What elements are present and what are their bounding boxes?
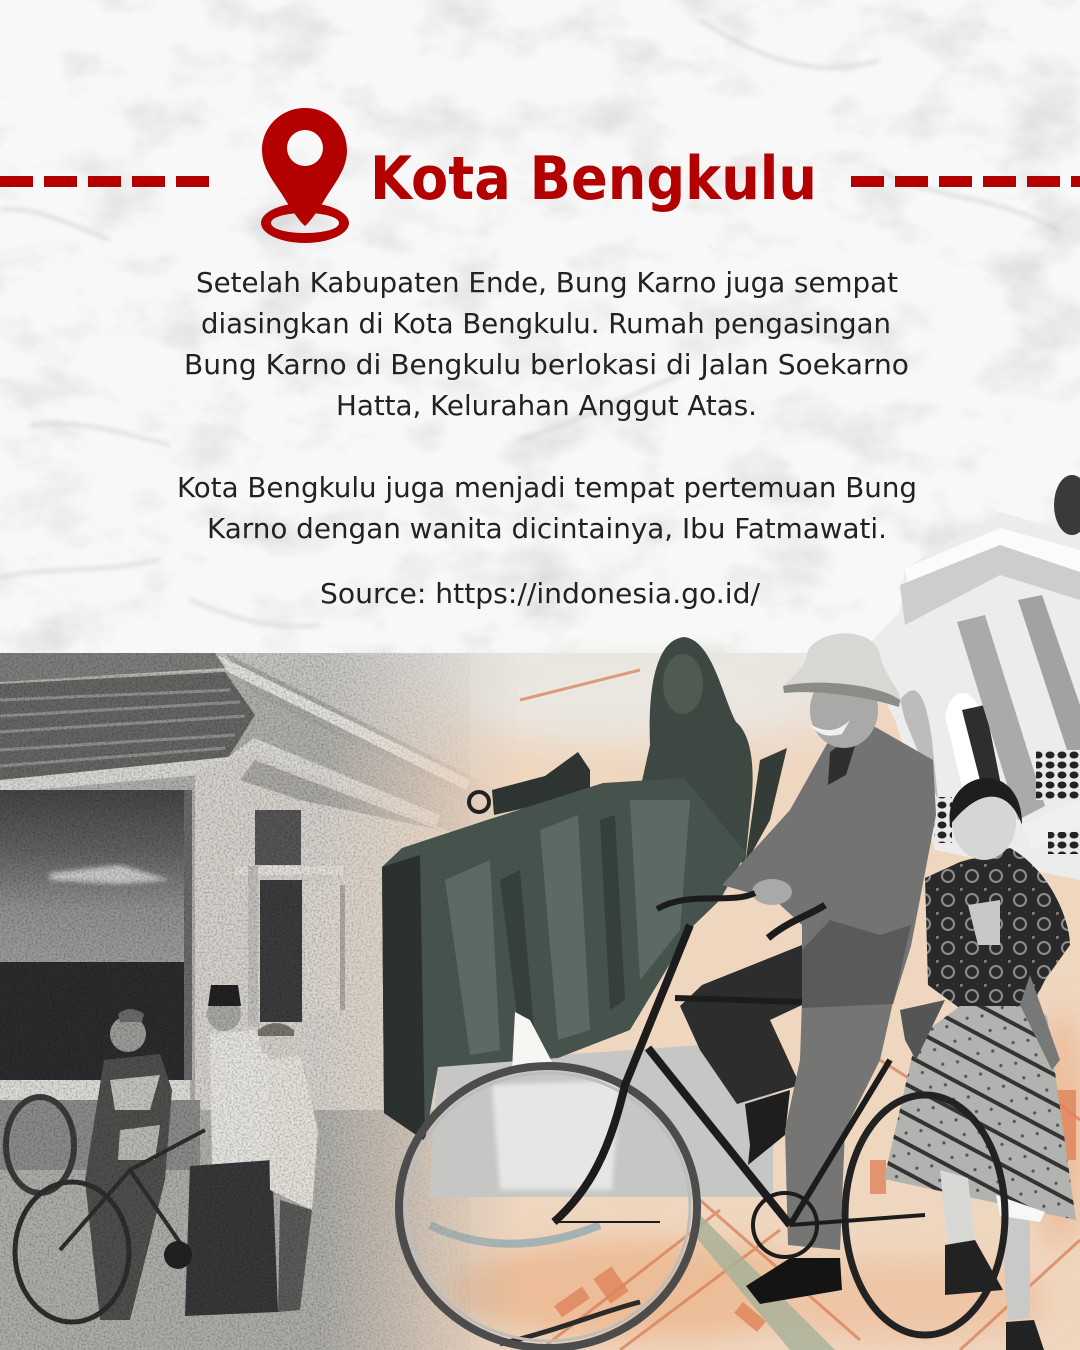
drapery — [382, 778, 746, 1141]
tiled roof — [0, 672, 255, 782]
sewing machine — [492, 752, 590, 815]
body text: diasingkan di Kota Bengkulu. Rumah pengasingan — [201, 307, 891, 340]
map background — [300, 653, 1080, 1350]
ledge and ground — [0, 1080, 190, 1100]
dashed line: right — [851, 176, 1080, 187]
upper roof strip — [107, 653, 450, 762]
seated figure — [640, 637, 753, 865]
right roof slope — [225, 653, 462, 772]
colonial house with columns — [860, 475, 1080, 880]
head and helmet — [810, 672, 878, 748]
window and door — [255, 810, 301, 865]
people in photo — [85, 985, 318, 1320]
body text: Hatta, Kelurahan Anggut Atas. — [336, 389, 757, 422]
seated thigh — [680, 945, 802, 1104]
photo: old exile house with family — [0, 653, 520, 1350]
eaves — [0, 738, 440, 826]
body text — [177, 266, 917, 545]
body text: Setelah Kabupaten Ende, Bung Karno juga sempat — [196, 266, 898, 299]
dashed line: left — [0, 176, 209, 187]
body text: Bung Karno di Bengkulu berlokasi di Jalan Soekarno — [184, 348, 909, 381]
title row — [0, 108, 1080, 243]
woman's legs and shoes — [940, 1170, 975, 1245]
bronze statue of Fatmawati sewing — [382, 637, 787, 1197]
map river — [690, 1215, 835, 1350]
bicycle frame — [554, 893, 925, 1257]
body text: Kota Bengkulu juga menjadi tempat pertemuan Bung — [177, 471, 917, 504]
hand — [752, 879, 792, 905]
map blocks — [554, 1090, 1076, 1332]
shoe — [746, 1258, 842, 1304]
bicycle wheels — [399, 1066, 1005, 1348]
body text: Karno dengan wanita dicintainya, Ibu Fatmawati. — [207, 512, 887, 545]
wall — [195, 752, 470, 1110]
veranda and dark window — [0, 790, 192, 962]
bicycle in photo — [15, 1130, 205, 1322]
map streets — [520, 670, 1080, 1350]
heading: Kota Bengkulu — [370, 144, 817, 214]
woman in batik — [884, 778, 1076, 1350]
location pin icon — [261, 108, 349, 243]
lower leg and shoe — [745, 1090, 790, 1165]
statue base — [429, 1045, 773, 1197]
man in pith helmet on bicycle — [680, 633, 936, 1304]
jacket — [722, 724, 936, 1008]
standing leg — [785, 1000, 893, 1250]
source line: Source: https://indonesia.go.id/ — [320, 577, 761, 610]
